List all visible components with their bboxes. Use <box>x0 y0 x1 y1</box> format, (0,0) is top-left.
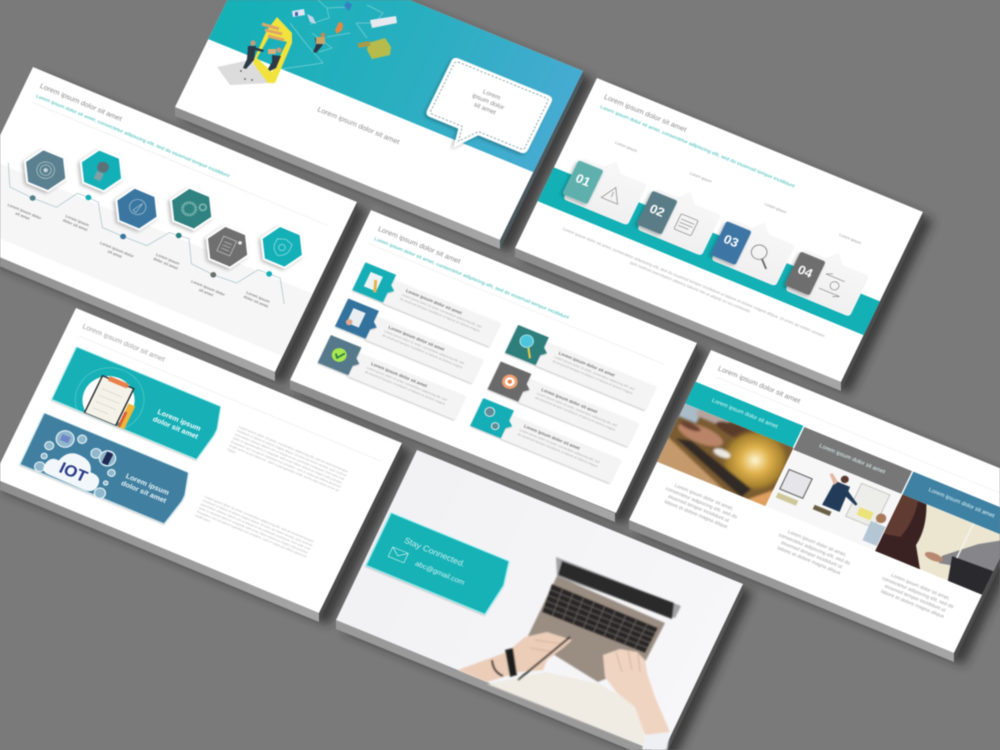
paragraph 1: fugiat. <box>227 447 237 454</box>
paragraph 2: Excepteur sint occaecat cupidatat non proident, sunt in culpa qui officia deserunt <box>196 510 307 559</box>
labels: Lorem ipsum dolor <box>99 240 135 259</box>
column 3: consectetur adipiscing elit, sed do <box>881 576 955 610</box>
heading: Lorem ipsum dolor sit amet <box>603 93 688 134</box>
column 3: labore et dolore magna aliqua <box>880 589 945 620</box>
panel: four-step slide <box>515 78 933 394</box>
column 1: Lorem ipsum dolor sit amet <box>711 398 779 430</box>
photo: presentation in office <box>774 468 892 547</box>
panel: contact slide with laptop <box>336 450 753 750</box>
contact banner <box>366 513 514 616</box>
column 1: labore et dolore magna aliqua <box>663 499 728 530</box>
step 03: 03 <box>721 231 741 250</box>
column 2: labore et dolore magna aliqua <box>776 545 842 576</box>
card 5: Lorem ipsum dolor sit amet, consectetur adipiscing elit, sed <box>536 392 618 428</box>
body text: Lorem ipsum dolor sit amet, consectetur adipiscing elit, sed do eiusmod tempor incididunt ut labore et dolore magna aliqua. Ut enim ad minim veniam <box>562 226 826 338</box>
step 02: Lorem ipsum <box>689 171 713 184</box>
icon: hexagon target <box>16 144 76 197</box>
step 04: Lorem ipsum <box>838 232 863 246</box>
column 2: eiusmod tempor incididunt ut <box>780 540 844 570</box>
card 4: do eiusmod tempor incididunt ut labore et dolore magna <box>552 359 633 395</box>
banner: IoT <box>19 413 194 527</box>
photo: laptop and hands <box>458 557 681 750</box>
paragraph 2: incididunt ut labore et dolore magna aliqua. Ut enim ad minim veniam, quis nostrud <box>202 498 313 547</box>
illustration: people, phone and icons <box>217 0 397 85</box>
column 2 <box>774 426 912 575</box>
banner: checklist: dolor sit amet <box>151 415 200 441</box>
heading: Lorem ipsum dolor sit amet <box>39 82 123 123</box>
photo: laptop with glow <box>656 404 794 507</box>
column 1: eiusmod tempor incididunt ut <box>667 494 730 524</box>
icon: IoT cloud: IOT <box>56 459 90 486</box>
paragraph 1 <box>227 425 350 497</box>
heading: Lorem ipsum dolor sit amet <box>717 365 802 405</box>
subheading: Lorem ipsum dolor sit amet, consectetur adipiscing elit, sed do eiusmod tempor incididunt <box>35 93 231 178</box>
step 02: 02 <box>647 201 667 220</box>
card 5: do eiusmod tempor incididunt ut labore et dolore magna <box>534 396 616 432</box>
paragraph 1: exercitation ullamco laboris nisi ut aliquip ex ea commodo consequat. Duis aute irure <box>234 432 345 481</box>
card 3: Lorem ipsum dolor sit amet, consectetur adipiscing elit, sed <box>366 366 448 402</box>
panel: three photo slide <box>626 349 1000 665</box>
labels: Lorem ipsum <box>65 213 91 228</box>
speech bubble: sit amet <box>473 101 497 116</box>
paragraph 1: mollit anim id est laborum. Sed ut perspiciatis unde omnis iste natus error sit <box>229 444 340 492</box>
labels: sit amet <box>107 249 123 259</box>
photo: handshake <box>873 494 1000 597</box>
card 1: Lorem ipsum dolor sit amet <box>405 288 463 316</box>
labels <box>5 191 272 319</box>
panel: six cards slide <box>290 210 707 525</box>
body text: quis nostrud exercitation ullamco laboris nisi ut aliquip ex ea commodo <box>629 260 752 314</box>
paragraph 1: Excepteur sint occaecat cupidatat non proident, sunt in culpa qui officia deserunt <box>230 440 342 489</box>
step 01 <box>560 130 660 226</box>
column 1 <box>656 381 804 528</box>
card 4 <box>505 325 658 410</box>
card 1: do eiusmod tempor incididunt ut labore et dolore magna <box>399 297 481 333</box>
step 03: Lorem ipsum <box>764 201 788 215</box>
banner: checklist <box>50 346 222 462</box>
contact banner: Stay Connected. <box>403 535 467 569</box>
column 2: Lorem ipsum dolor sit amet <box>818 443 886 476</box>
icon: hexagon shield <box>252 221 312 273</box>
teal band <box>538 167 880 335</box>
labels: sit amet <box>198 287 215 298</box>
card 5: Lorem ipsum dolor sit amet <box>540 387 599 414</box>
card 3: do eiusmod tempor incididunt ut labore et dolore magna <box>364 370 446 406</box>
paragraph 1: dolor in reprehenderit in voluptate velit esse cillum dolore eu fugiat nulla pariatur. <box>232 436 343 485</box>
step 04 <box>782 222 882 317</box>
subheading: Lorem ipsum dolor sit amet, consectetur adipiscing elit, sed do eiusmod tempor incididunt <box>599 104 796 189</box>
heading: Lorem ipsum dolor sit amet <box>81 323 166 363</box>
caption: Lorem ipsum dolor sit amet <box>316 106 401 146</box>
labels: Lorem ipsum <box>155 252 181 266</box>
paragraph 1: incididunt ut labore et dolore magna aliqua. Ut enim ad minim veniam, quis nostrud <box>236 429 347 477</box>
step 01: Lorem ipsum <box>614 140 639 153</box>
icon: hexagon document <box>198 220 258 273</box>
card 6: do eiusmod tempor incididunt ut labore et dolore magna <box>517 432 599 468</box>
labels: Lorem ipsum dolor <box>7 202 43 221</box>
step 02 <box>634 161 734 256</box>
icon: envelope <box>388 547 408 563</box>
icon: hexagon gears <box>162 182 222 235</box>
panel: title slide with illustration <box>175 0 593 252</box>
icon: IoT cloud <box>32 423 126 500</box>
step 04: 04 <box>795 262 816 281</box>
column 2: Lorem ipsum dolor sit amet, <box>786 529 847 558</box>
speech bubble: ipsum dolor <box>471 92 506 112</box>
column 3: Lorem ipsum dolor sit amet, <box>890 573 951 602</box>
contact banner: abc@gmail.com <box>414 560 466 587</box>
paragraph 2: dolor in reprehenderit in voluptate velit esse cillum dolore eu fugiat nulla pariatur. <box>198 506 309 555</box>
heading: Lorem ipsum dolor sit amet <box>377 225 462 265</box>
banner: IoT: dolor sit amet <box>120 479 168 505</box>
card 2: Lorem ipsum dolor sit amet, consectetur adipiscing elit, sed <box>384 329 465 365</box>
column 3: eiusmod tempor incididunt ut <box>883 584 947 614</box>
speech bubble: Lorem <box>481 89 502 102</box>
panel: two banners slide <box>0 308 412 625</box>
column 3: Lorem ipsum dolor sit amet <box>927 487 996 520</box>
banner: checklist: Lorem ipsum <box>156 408 202 433</box>
labels: Lorem ipsum <box>245 290 271 304</box>
icon: hexagon compass <box>107 182 167 235</box>
card 4: Lorem ipsum dolor sit amet, consectetur adipiscing elit, sed <box>554 355 635 391</box>
card 3 <box>317 335 468 420</box>
step 01: 01 <box>573 171 593 189</box>
labels: dolor sit amet <box>243 294 270 309</box>
speech bubble <box>416 56 554 173</box>
card 3: Lorem ipsum dolor sit amet <box>370 361 428 389</box>
column 3 <box>857 471 1000 630</box>
card 6: Lorem ipsum dolor sit amet <box>523 424 581 451</box>
labels: sit amet <box>14 211 31 221</box>
panel: hexagon timeline slide <box>0 67 367 384</box>
card 2: do eiusmod tempor incididunt ut labore et dolore magna <box>382 333 463 369</box>
paragraph 2: Lorem ipsum dolor sit amet, consectetur adipiscing elit, sed do eiusmod tempor <box>204 495 316 544</box>
card 2 <box>335 299 485 383</box>
teal band <box>208 0 583 172</box>
card 4: Lorem ipsum dolor sit amet <box>558 351 616 378</box>
card 6: Lorem ipsum dolor sit amet, consectetur adipiscing elit, sed <box>519 428 601 464</box>
labels: dolor sit amet <box>153 256 180 271</box>
column 2: consectetur adipiscing elit, sed do <box>777 532 851 567</box>
step 03 <box>708 191 808 286</box>
icon: hexagon figure <box>72 144 131 197</box>
subheading: Lorem ipsum dolor sit amet, consectetur adipiscing elit, sed do eiusmod tempor incididunt <box>373 236 571 320</box>
card 2: Lorem ipsum dolor sit amet <box>388 325 446 352</box>
card 1: Lorem ipsum dolor sit amet, consectetur adipiscing elit, sed <box>401 293 483 329</box>
labels: dolor sit amet <box>62 218 89 232</box>
labels: Lorem ipsum dolor <box>190 279 226 297</box>
connector line with dots <box>0 161 296 307</box>
card 5 <box>487 361 641 447</box>
paragraph 2: mollit anim. <box>194 514 212 523</box>
column 1: consectetur adipiscing elit, sed do <box>664 486 738 520</box>
paragraph 1: Lorem ipsum dolor sit amet, consectetur adipiscing elit, sed do eiusmod tempor <box>238 425 350 474</box>
banner: IoT: Lorem ipsum <box>124 472 170 497</box>
card 6 <box>470 398 623 483</box>
paragraph 2: exercitation ullamco laboris nisi ut aliquip ex ea commodo consequat. Duis aute irure <box>200 502 311 551</box>
column 1: Lorem ipsum dolor sit amet, <box>673 483 734 512</box>
card 1 <box>352 262 503 347</box>
